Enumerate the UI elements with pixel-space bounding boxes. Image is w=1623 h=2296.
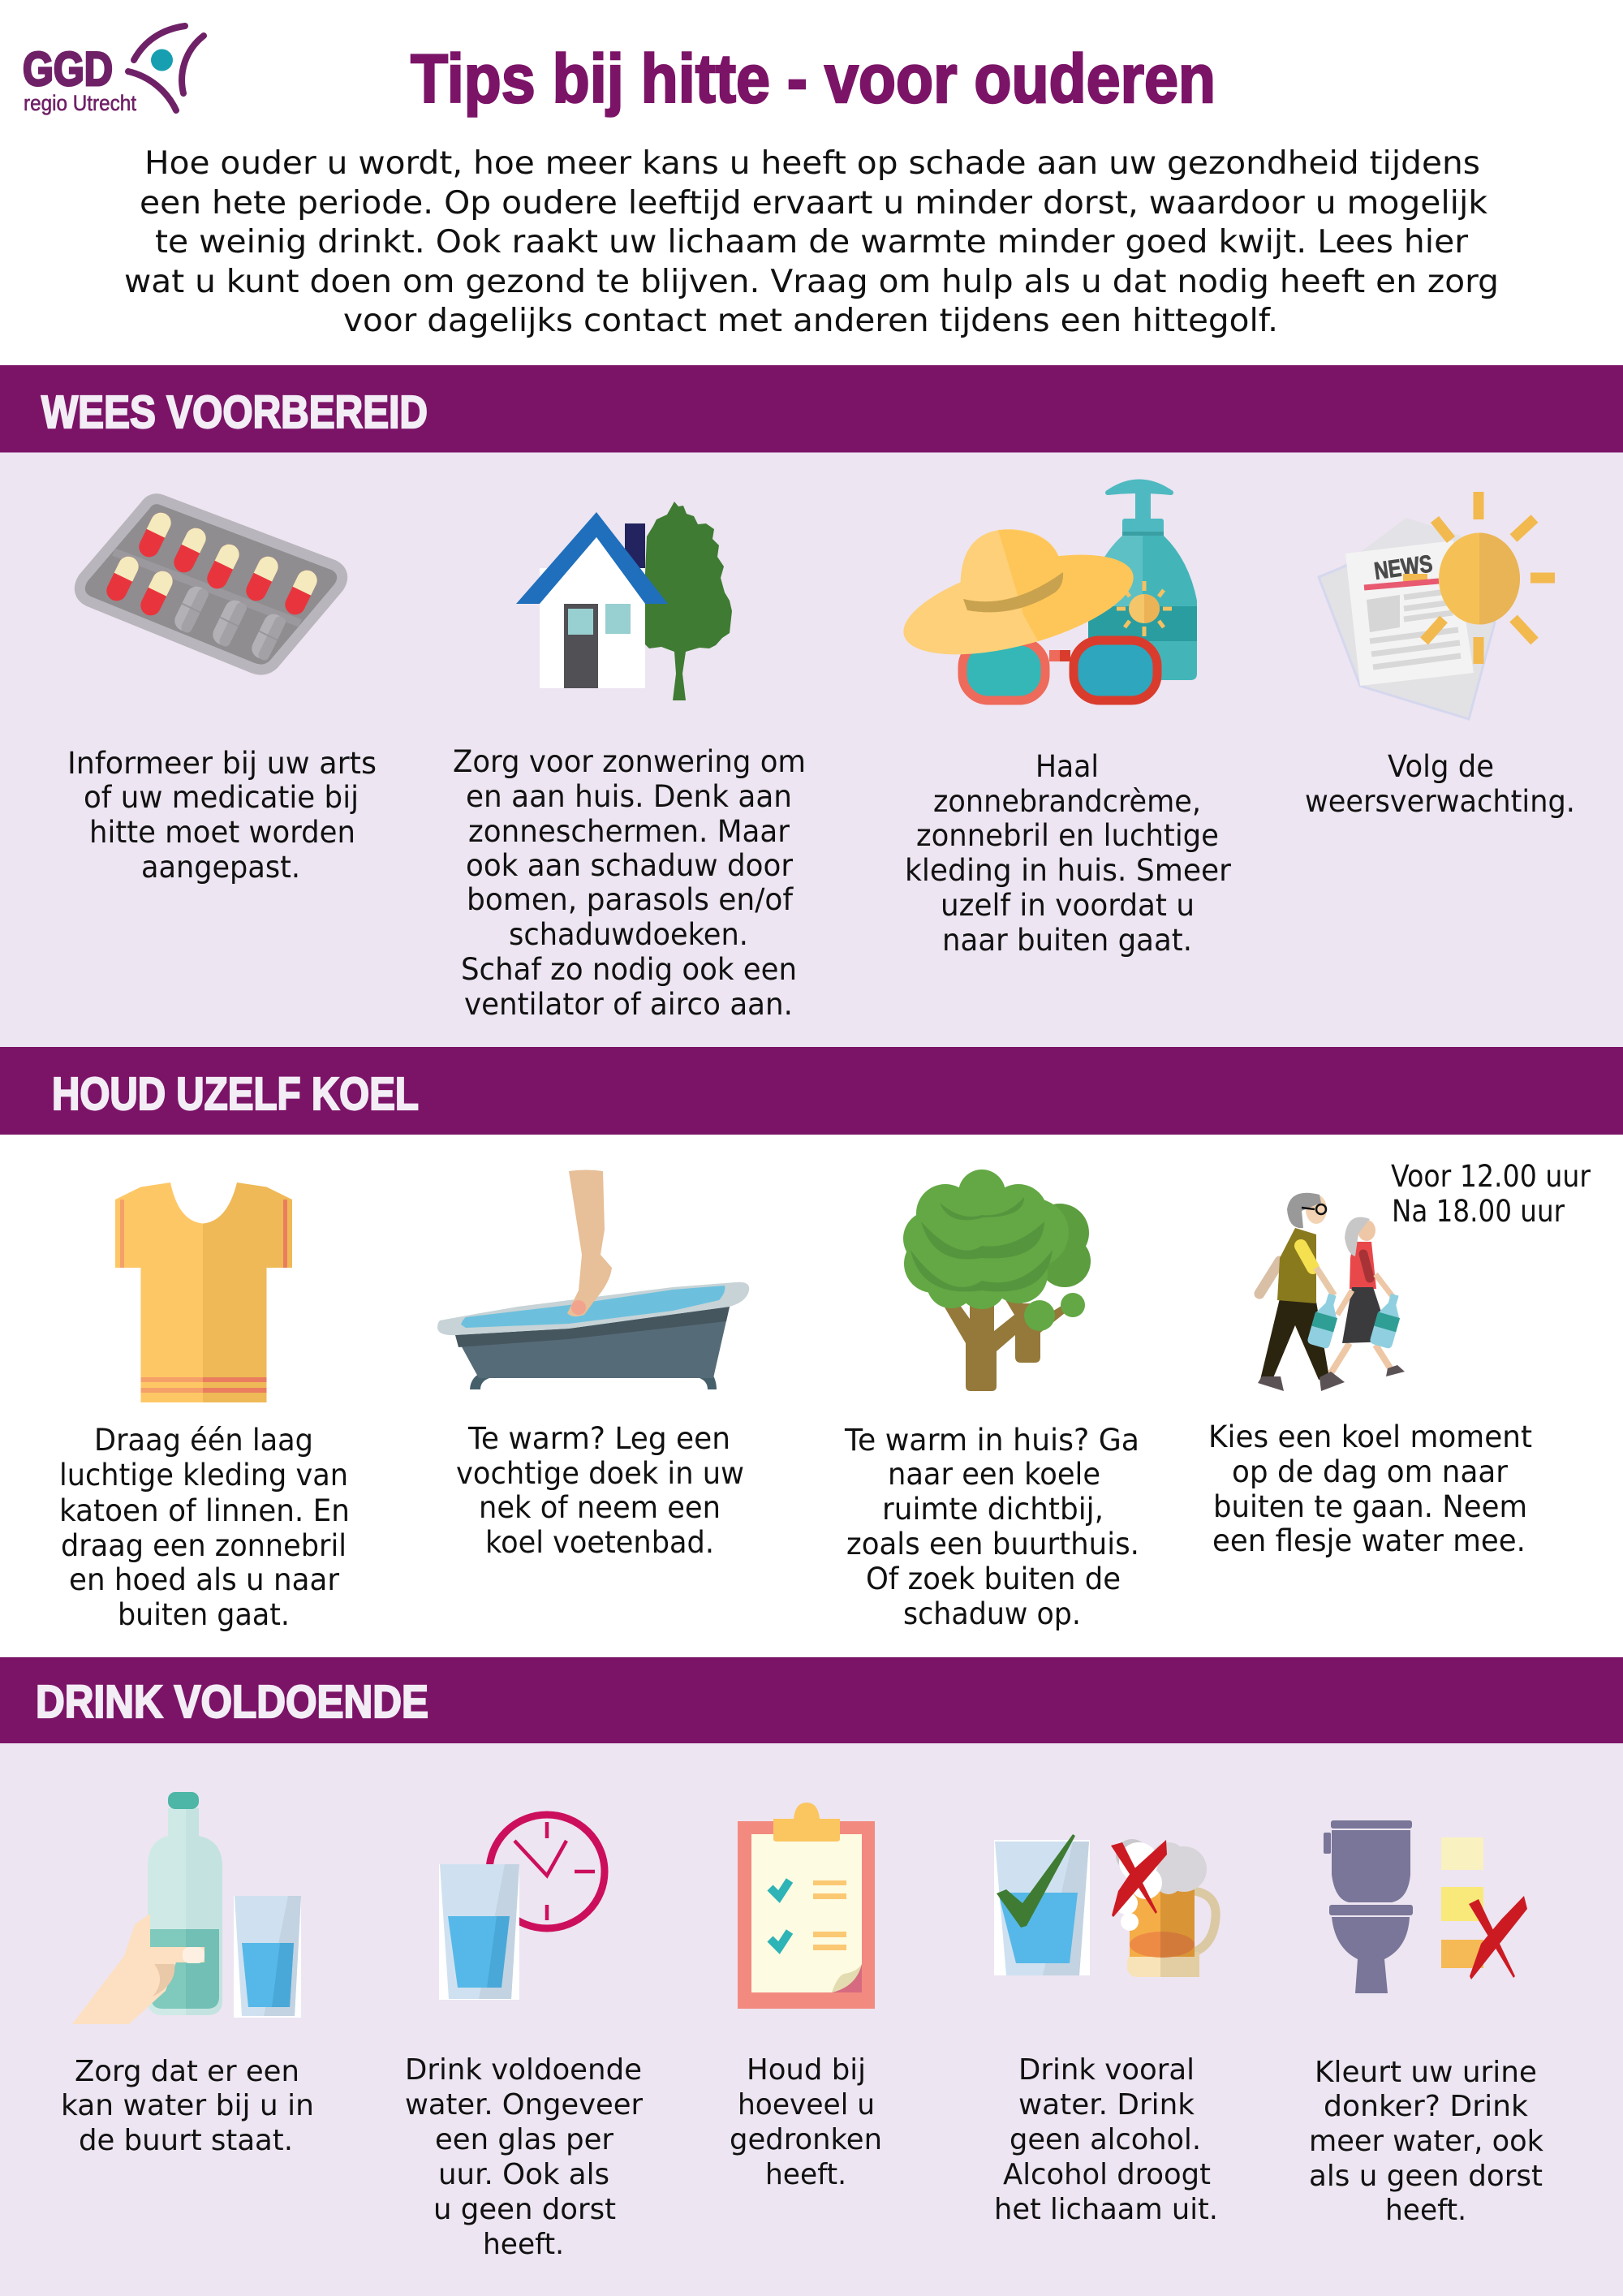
text: weather forecast (1305, 749, 1575, 819)
text: cool space: Of zoek buiten de (866, 1562, 1121, 1596)
text: water jug: de buurt staat. (79, 2124, 293, 2157)
text: foot bath: nek of neem een (479, 1490, 721, 1525)
text: keep track (730, 2053, 882, 2191)
text: urine colour (1309, 2056, 1543, 2227)
icon: water bottle with hand and glass (72, 1792, 301, 2024)
text: foot bath: koel voetenbad. (485, 1525, 714, 1560)
text: sunscreen: kleding in huis. Smeer (905, 853, 1232, 888)
text: sunscreen: naar buiten gaat. (942, 923, 1192, 958)
text: sunscreen: Haal (1035, 749, 1099, 784)
text: clothing (59, 1423, 350, 1632)
text: sunscreen: zonnebril en luchtige (916, 818, 1219, 853)
text: drink enough water: Drink voldoende (405, 2053, 642, 2087)
section band: Drink voldoende (0, 1657, 1623, 1743)
text: sun protection at home (453, 744, 806, 1022)
text: urine colour: Kleurt uw urine (1315, 2056, 1537, 2089)
text: no alcohol: water. Drink (1018, 2088, 1195, 2122)
text: sun protection at home: ventilator of airco aan. (464, 987, 793, 1022)
text: drink enough water: een glas per (435, 2123, 613, 2156)
text: foot bath: Te warm? Leg een (467, 1421, 730, 1456)
text: times of day: Na 18.00 uur (1392, 1194, 1565, 1229)
intro text: voor dagelijks contact met anderen tijdens een hittegolf. (343, 303, 1278, 339)
text: cool space: schaduw op. (903, 1596, 1081, 1631)
text: sunscreen: zonnebrandcrème, (933, 784, 1201, 819)
text: sun protection at home: Schaf zo nodig ook een (461, 952, 797, 987)
text: clothing: Draag één laag (94, 1423, 313, 1458)
logo: GGD regio Utrecht (23, 26, 204, 115)
text: cool moment: Kies een koel moment (1208, 1419, 1532, 1454)
text: sun protection at home: Zorg voor zonwering om (453, 744, 806, 779)
text: sun protection at home: zonneschermen. Maar (468, 814, 790, 849)
intro text (124, 145, 1499, 339)
section band: Wees voorbereid (0, 365, 1623, 453)
text: cool moment: op de dag om naar (1232, 1454, 1509, 1489)
text: foot bath (456, 1421, 744, 1560)
icon: elderly couple walking with water bottles (1258, 1193, 1406, 1391)
text: no alcohol: Drink vooral (1018, 2053, 1195, 2087)
text: clothing: luchtige kleding van (59, 1458, 348, 1493)
text: sun protection at home: bomen, parasols en/of (467, 882, 794, 917)
icon: clipboard checklist (738, 1803, 875, 2009)
text: clothing: katoen of linnen. En (59, 1493, 350, 1528)
text: keep track: hoeveel u (738, 2088, 875, 2122)
text: weather forecast: Volg de (1388, 749, 1494, 784)
text: drink enough water (405, 2053, 643, 2261)
icon: medicine blister (85, 504, 337, 665)
text: drink enough water: uur. Ook als (438, 2158, 609, 2191)
text: medication: Informeer bij uw arts (67, 746, 377, 781)
icon: foot bath (437, 1170, 749, 1389)
text: cool moment: buiten te gaan. Neem (1213, 1489, 1527, 1524)
intro text: te weinig drinkt. Ook raakt uw lichaam de warmte minder goed kwijt. Lees hier (155, 224, 1469, 261)
text: sunscreen (905, 749, 1232, 958)
intro text: wat u kunt doen om gezond te blijven. Vraag om hulp als u dat nodig heeft en zorg (124, 264, 1499, 300)
text: drink enough water: heeft. (483, 2228, 564, 2261)
text: keep track: gedronken (730, 2123, 882, 2156)
title: Tips bij hitte - voor ouderen (411, 41, 1216, 117)
text: sun protection at home: en aan huis. Denk aan (466, 779, 792, 814)
icon: tree (903, 1170, 1091, 1391)
text: cool space: zoals een buurthuis. (846, 1527, 1139, 1562)
text: sunscreen: uzelf in voordat u (941, 888, 1195, 923)
text: cool moment: een flesje water mee. (1212, 1523, 1526, 1558)
text: cool space: naar een koele (888, 1457, 1100, 1492)
text: urine colour: heeft. (1385, 2194, 1466, 2227)
text: cool space: ruimte dichtbij, (882, 1492, 1104, 1527)
logo: GGD regio Utrecht: GGD (23, 43, 113, 96)
intro text: een hete periode. Op oudere leeftijd ervaart u minder dorst, waardoor u mogelijk (140, 185, 1487, 222)
icon: glass and clock (439, 1815, 605, 2000)
text: keep track: Houd bij (747, 2053, 866, 2087)
text: sun protection at home: schaduwdoeken. (509, 917, 748, 952)
text: water jug: kan water bij u in (61, 2089, 314, 2122)
text: no alcohol: het lichaam uit. (994, 2193, 1218, 2226)
text: medication: hitte moet worden (89, 815, 355, 850)
section band: Wees voorbereid: WEES VOORBEREID (41, 386, 428, 438)
text: clothing: buiten gaat. (118, 1597, 290, 1632)
text: keep track: heeft. (765, 2158, 846, 2191)
intro text: Hoe ouder u wordt, hoe meer kans u heeft op schade aan uw gezondheid tijdens (144, 145, 1480, 182)
logo: GGD regio Utrecht: regio Utrecht (24, 91, 136, 115)
text: medication (67, 746, 377, 885)
section band: Houd uzelf koel (0, 1047, 1623, 1135)
text: medication: of uw medicatie bij (84, 780, 359, 815)
text: drink enough water: water. Ongeveer (405, 2088, 643, 2122)
text: sun protection at home: ook aan schaduw door (466, 848, 794, 883)
icon: shirt (115, 1182, 292, 1402)
text: foot bath: vochtige doek in uw (456, 1456, 744, 1491)
text: medication: aangepast. (141, 850, 300, 885)
icon: toilet and urine colours (1324, 1820, 1527, 1993)
text: clothing: en hoed als u naar (69, 1562, 340, 1597)
text: cool space (844, 1423, 1139, 1631)
section band: Houd uzelf koel: HOUD UZELF KOEL (52, 1068, 419, 1120)
text: times of day (1391, 1159, 1591, 1229)
text: clothing: draag een zonnebril (61, 1528, 347, 1563)
text: water jug: Zorg dat er een (75, 2055, 299, 2088)
text: cool moment (1208, 1419, 1532, 1558)
icon: newspaper and sun (1319, 492, 1555, 719)
text: urine colour: donker? Drink (1324, 2090, 1528, 2123)
text: no alcohol: Alcohol droogt (1003, 2158, 1211, 2191)
icon: hat, sunscreen and sunglasses (893, 482, 1197, 700)
icon: newspaper and sun: NEWS (1372, 550, 1434, 585)
section band: Drink voldoende: DRINK VOLDOENDE (36, 1676, 428, 1728)
text: no alcohol: geen alcohol. (1010, 2123, 1201, 2156)
text: water jug (61, 2055, 314, 2157)
text: urine colour: als u geen dorst (1309, 2160, 1543, 2193)
icon: water yes, beer no (994, 1834, 1216, 1977)
text: urine colour: meer water, ook (1309, 2125, 1543, 2158)
text: weather forecast: weersverwachting. (1305, 784, 1575, 819)
text: no alcohol (994, 2053, 1218, 2226)
text: times of day: Voor 12.00 uur (1391, 1159, 1591, 1194)
icon: house and tree (516, 502, 732, 700)
text: drink enough water: u geen dorst (433, 2193, 616, 2226)
text: cool space: Te warm in huis? Ga (844, 1423, 1139, 1458)
